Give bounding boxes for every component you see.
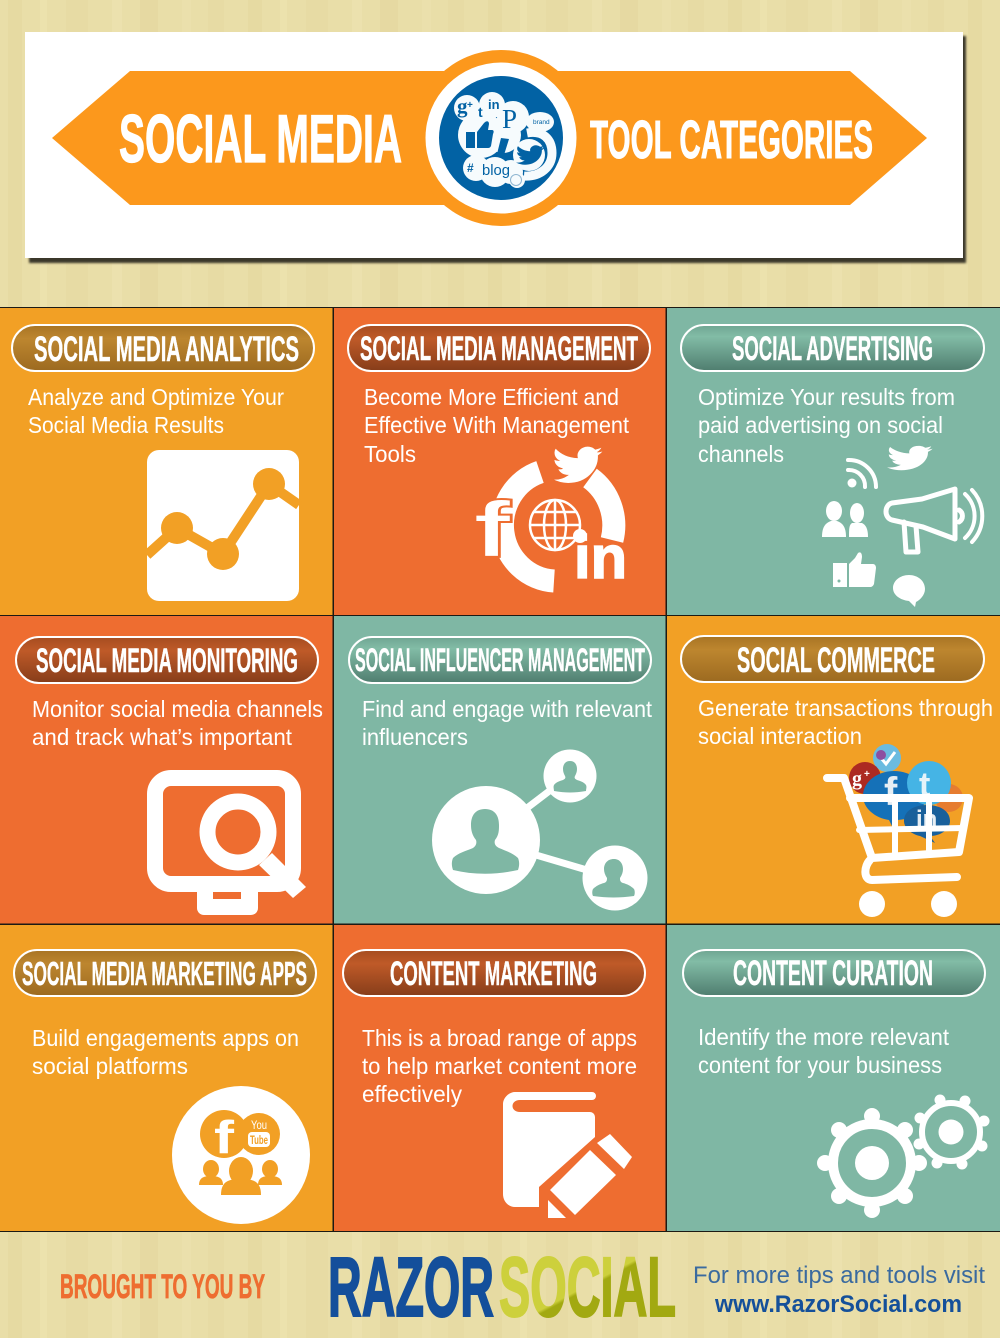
icon: shopping cart with social bubbles: + — [864, 769, 870, 780]
description — [698, 695, 993, 749]
pill heading: SOCIAL MEDIA MANAGEMENT — [360, 330, 638, 368]
icon: shopping cart with social bubbles: in — [916, 806, 937, 833]
pill heading — [12, 325, 314, 371]
icon: shopping cart with social bubbles: t — [919, 766, 930, 804]
header card — [25, 32, 966, 263]
panel: social advertising — [667, 308, 1000, 615]
footer: razorsocial logo: RAZOR — [328, 1240, 494, 1334]
logo badge: social icons: blog — [482, 162, 510, 179]
description — [32, 1025, 299, 1079]
description: Social Media Results — [28, 412, 224, 438]
logo badge: social icons: in — [488, 97, 500, 112]
icon: bird — [887, 446, 933, 470]
description: effectively — [362, 1081, 462, 1107]
icon: gears — [817, 1094, 990, 1218]
description — [28, 384, 284, 438]
pill heading: CONTENT MARKETING — [390, 955, 597, 993]
logo badge: social icons: # — [467, 161, 474, 175]
icon: monitor with magnifier — [155, 778, 306, 915]
panel: social media management — [334, 308, 666, 615]
pill heading — [14, 950, 316, 996]
footer: brought to you by: BROUGHT TO YOU BY — [60, 1268, 265, 1306]
icon: megaphone — [886, 489, 982, 552]
banner arrow — [52, 71, 927, 205]
logo badge: social icons: brand — [533, 119, 550, 126]
description: Build engagements apps on — [32, 1025, 299, 1051]
pill heading — [349, 637, 651, 683]
icon: people — [822, 501, 868, 537]
description: Effective With Management — [364, 412, 630, 438]
pill heading — [348, 325, 650, 371]
icon: book and pencil — [503, 1092, 632, 1218]
pill heading — [343, 950, 645, 996]
description: influencers — [362, 724, 468, 750]
panel: content marketing — [334, 925, 666, 1231]
icon: apps circle: Tube — [250, 1133, 268, 1147]
description — [362, 696, 653, 750]
description: channels — [698, 441, 784, 467]
description — [32, 696, 323, 750]
icon: social ring: in — [574, 524, 627, 591]
footer: razorsocial logo: SOCIAL — [499, 1240, 676, 1334]
title: social media: SOCIAL MEDIA — [119, 101, 402, 177]
panel: social media monitoring — [0, 616, 332, 924]
footer: visit text: For more tips and tools visit — [693, 1262, 985, 1289]
icon: line chart — [147, 450, 299, 601]
logo badge: social icons: P — [502, 104, 517, 134]
icon: social ring — [473, 446, 627, 591]
description: content for your business — [698, 1052, 942, 1078]
icon: shopping cart with social bubbles: f — [884, 770, 898, 814]
footer: visit text: www.RazorSocial.com — [714, 1291, 962, 1318]
description: Analyze and Optimize Your — [28, 384, 284, 410]
description: Become More Efficient and — [364, 384, 619, 410]
description — [698, 384, 955, 467]
icon: social ring: f — [473, 485, 512, 574]
description: Identify the more relevant — [698, 1024, 950, 1050]
logo badge: social icons: t — [478, 104, 483, 120]
description — [364, 384, 630, 467]
panel: social influencer management — [334, 616, 666, 924]
description — [698, 1024, 950, 1078]
icon: influencer network — [432, 750, 648, 910]
panel: social commerce — [667, 616, 1000, 924]
icon: apps circle: You — [251, 1118, 267, 1132]
icon: advertising cluster — [822, 446, 982, 607]
footer: visit text — [693, 1262, 985, 1318]
description: to help market content more — [362, 1053, 637, 1079]
footer wood strip — [0, 1232, 1000, 1338]
description: Monitor social media channels — [32, 696, 323, 722]
panel: social media analytics — [0, 308, 332, 615]
pill heading: SOCIAL INFLUENCER MANAGEMENT — [355, 642, 645, 678]
pill heading — [681, 325, 984, 371]
icon: speech bubble — [893, 575, 925, 607]
logo badge: social icons — [413, 50, 589, 226]
pill heading — [681, 636, 984, 682]
icon: apps circle: f — [214, 1111, 235, 1163]
description — [362, 1025, 637, 1107]
description: social interaction — [698, 723, 862, 749]
icon: rss — [848, 460, 876, 488]
icon: shopping cart with social bubbles — [827, 744, 969, 917]
pill heading: SOCIAL MEDIA MONITORING — [36, 642, 298, 680]
icon: shopping cart with social bubbles: g — [852, 768, 862, 790]
pill heading: SOCIAL MEDIA MARKETING APPS — [22, 955, 307, 992]
description: paid advertising on social — [698, 412, 943, 438]
panel: social media marketing apps — [0, 925, 332, 1231]
panel: content curation — [667, 925, 1000, 1231]
pill heading: SOCIAL MEDIA ANALYTICS — [34, 330, 299, 369]
grid background lines — [0, 307, 1000, 1232]
logo badge: social icons: g — [457, 94, 468, 118]
description: Tools — [364, 441, 416, 467]
pill heading — [16, 637, 318, 683]
pill heading — [683, 950, 985, 996]
icon: thumbs up — [833, 552, 876, 587]
description: Optimize Your results from — [698, 384, 955, 410]
description: Find and engage with relevant — [362, 696, 653, 722]
description: This is a broad range of apps — [362, 1025, 637, 1051]
description: social platforms — [32, 1053, 188, 1079]
description: and track what’s important — [32, 724, 293, 750]
icon: apps circle — [172, 1086, 310, 1224]
logo badge: social icons: + — [467, 100, 473, 111]
description: Generate transactions through — [698, 695, 993, 721]
